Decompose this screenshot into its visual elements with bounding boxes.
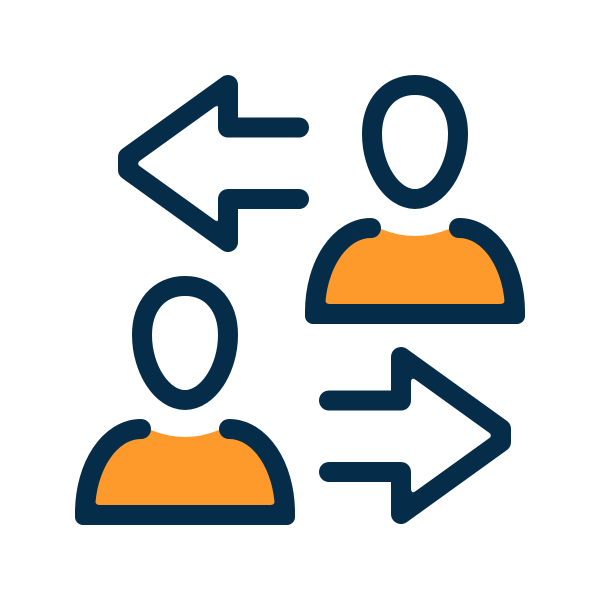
upper person head: [372, 85, 458, 199]
icon: lower person: [75, 286, 295, 525]
upper person body outline: [305, 228, 525, 324]
lower person head: [142, 286, 228, 400]
icon: upper person: [305, 85, 525, 324]
upper person shirt: [315, 228, 515, 314]
icon: right arrow: [329, 357, 501, 514]
lower person body outline: [75, 429, 295, 525]
icon: left arrow: [128, 85, 299, 242]
lower person shirt: [85, 429, 285, 515]
